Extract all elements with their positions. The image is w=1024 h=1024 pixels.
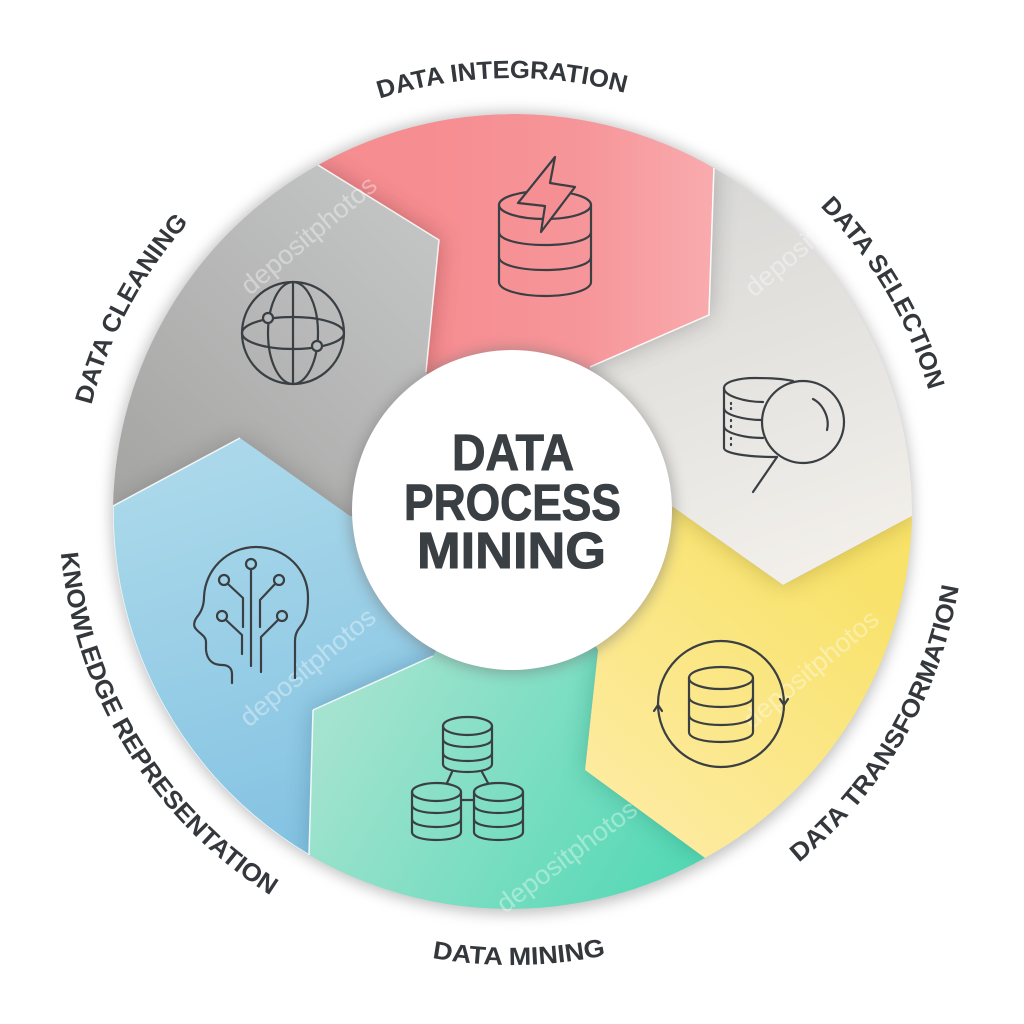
center circle — [352, 350, 672, 670]
center circle shadow — [350, 349, 674, 673]
icon: database with magnifier — [724, 378, 844, 492]
watermark: depositphotos — [737, 604, 885, 735]
icon: database with lightning bolt — [499, 157, 591, 296]
icon: database with cycle arrows — [654, 641, 788, 767]
label: data cleaning: DATA CLEANING — [75, 215, 186, 404]
icon: head with circuits — [194, 547, 308, 683]
label: data mining: DATA MINING — [434, 940, 604, 966]
segment: data mining — [309, 646, 705, 909]
watermark: depositphotos — [739, 172, 887, 303]
segment edge highlights — [113, 165, 714, 855]
watermark: depositphotos — [235, 170, 383, 301]
label: data selection: DATA SELECTION — [821, 196, 944, 389]
segment: data selection — [595, 168, 912, 585]
icon: globe — [242, 282, 344, 384]
segment: data cleaning — [113, 166, 410, 516]
title: DATA — [452, 424, 574, 481]
watermark — [234, 170, 887, 919]
title: PROCESS — [404, 474, 621, 531]
label: data transformation: DATA TRANSFORMATION — [789, 585, 958, 862]
segment: data integration — [318, 114, 714, 374]
title: MINING — [417, 522, 606, 579]
title — [404, 424, 621, 579]
watermark: depositphotos — [491, 794, 643, 919]
label: data integration: DATA INTEGRATION — [376, 60, 628, 98]
segment: knowledge representation — [113, 438, 436, 854]
segment: data transformation — [585, 507, 912, 858]
ring shadow — [111, 112, 913, 914]
watermark: depositphotos — [234, 602, 382, 733]
label: knowledge representation: KNOWLEDGE REPRESENTATION — [60, 552, 310, 894]
icon: three linked databases — [412, 717, 523, 840]
